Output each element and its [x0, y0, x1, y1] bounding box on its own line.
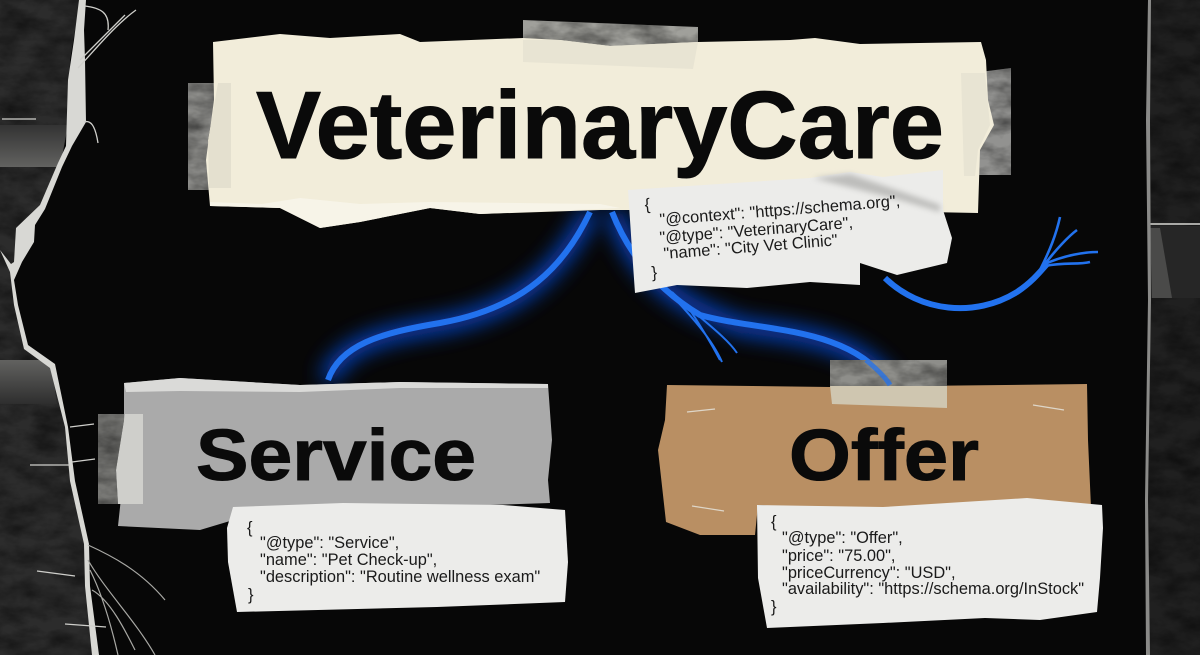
panel: Offer paper — [658, 384, 1092, 535]
code text: { — [644, 196, 651, 214]
blue string glow — [328, 212, 890, 385]
panel: torn paper right edge — [1145, 0, 1200, 655]
heading: Offer — [789, 416, 979, 496]
code text: } — [248, 586, 254, 604]
panel: torn paper left edge — [0, 0, 165, 655]
code text: "@type": "VeterinaryCare", — [659, 214, 854, 247]
code text — [644, 192, 901, 282]
code text: "description": "Routine wellness exam" — [260, 568, 540, 586]
code text: "availability": "https://schema.org/InStock" — [782, 580, 1084, 598]
panel: tape left of Service — [98, 414, 125, 504]
panel: tape right of title — [978, 68, 1011, 175]
panel: JSON note VeterinaryCare — [628, 170, 952, 293]
code text: "name": "City Vet Clinic" — [663, 231, 838, 263]
panel: JSON note Offer — [757, 498, 1103, 628]
string: VeterinaryCare to Offer — [612, 212, 890, 385]
code text: "@type": "Offer", — [782, 529, 903, 547]
title: VeterinaryCare — [256, 72, 944, 179]
string: loose end right — [885, 217, 1098, 308]
code text: "name": "Pet Check-up", — [260, 551, 437, 569]
code text: } — [771, 598, 777, 616]
code text — [771, 513, 1084, 616]
code text: { — [247, 519, 253, 537]
code text: "priceCurrency": "USD", — [782, 564, 956, 582]
code text: "@type": "Service", — [260, 534, 399, 552]
tape overlay top of title — [523, 40, 698, 69]
panel: JSON note Service — [227, 503, 568, 612]
string over tape — [866, 360, 890, 385]
heading: Service — [196, 416, 476, 496]
code text — [247, 519, 540, 604]
code text: "@context": "https://schema.org", — [659, 192, 901, 229]
tape top of title behind paper — [523, 20, 698, 60]
panel: tape left of title — [188, 83, 218, 190]
panel: tape right overlay on title — [961, 73, 990, 176]
code text: "price": "75.00", — [782, 547, 895, 565]
tape top of Offer — [830, 360, 947, 408]
code text: } — [651, 264, 658, 282]
panel: VeterinaryCare paper — [206, 34, 994, 228]
panel: Service paper — [118, 378, 552, 530]
panel: tape left overlay on title — [208, 83, 231, 188]
string: VeterinaryCare to Service — [328, 212, 590, 380]
code text: { — [771, 513, 777, 531]
tape overlay on Service — [116, 414, 143, 504]
